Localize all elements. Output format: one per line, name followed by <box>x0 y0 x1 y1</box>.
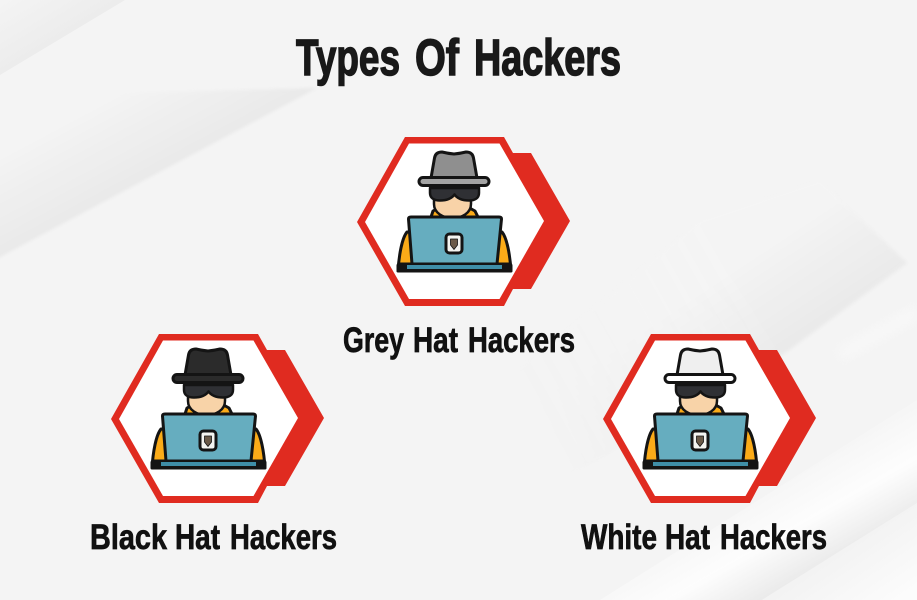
title <box>296 29 621 86</box>
panel: black hat hackers <box>111 334 324 503</box>
label: black hat hackers: Black <box>90 518 167 557</box>
icon: hexagon badge <box>357 137 570 306</box>
label: grey hat hackers <box>343 321 575 360</box>
title: Hackers <box>474 29 621 86</box>
label: white hat hackers: Hat <box>665 518 710 557</box>
panel: white hat hackers <box>603 334 816 503</box>
label: black hat hackers: Hackers <box>230 518 337 557</box>
icon: white hat hacker <box>644 349 757 468</box>
panel: grey hat hackers <box>357 137 570 306</box>
label: white hat hackers <box>581 518 827 557</box>
icon: hexagon badge <box>111 334 324 503</box>
label: grey hat hackers: Hackers <box>468 321 575 360</box>
icon: grey hat hacker <box>398 152 511 271</box>
label: black hat hackers <box>90 518 337 557</box>
label: white hat hackers: White <box>581 518 657 557</box>
icon: black hat hacker <box>152 349 265 468</box>
icon: hexagon badge <box>603 334 816 503</box>
label: grey hat hackers: Grey <box>343 321 404 360</box>
label: white hat hackers: Hackers <box>720 518 827 557</box>
label: grey hat hackers: Hat <box>413 321 458 360</box>
title: Of <box>415 29 460 86</box>
title: Types <box>296 29 400 86</box>
label: black hat hackers: Hat <box>175 518 220 557</box>
